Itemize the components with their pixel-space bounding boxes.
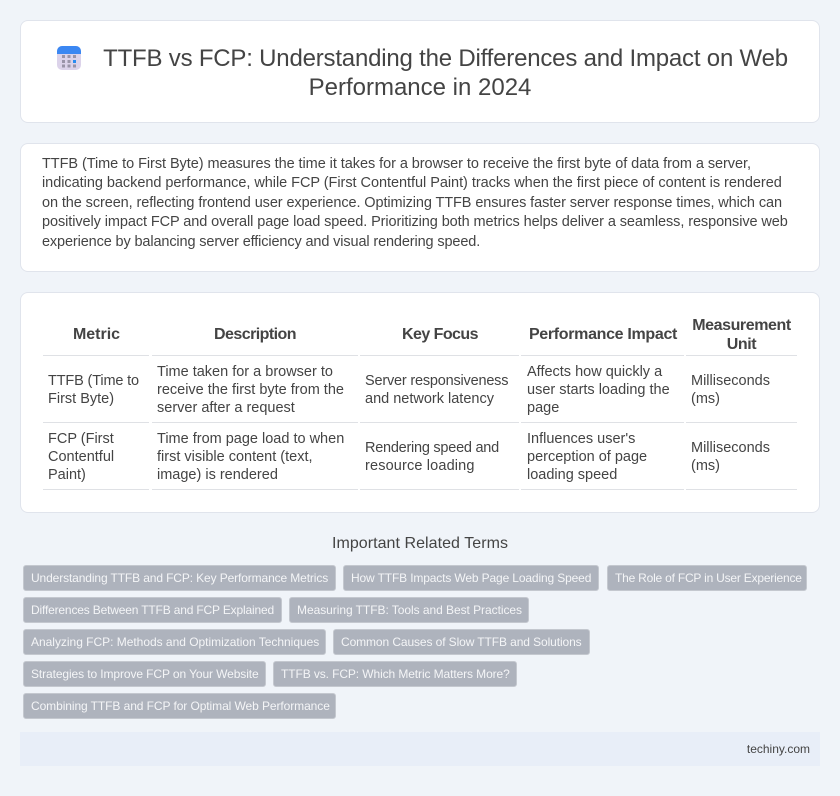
table headers: Unit <box>727 336 756 353</box>
row: TTFB: Milliseconds <box>691 373 770 389</box>
row: FCP: Influences user's <box>527 431 635 447</box>
chip: TTFB vs. FCP: Which Metric Matters More? <box>281 667 510 681</box>
row: FCP: first visible content (text, <box>157 449 313 465</box>
related terms heading: Important Related Terms <box>332 535 508 552</box>
row: TTFB <box>48 364 770 416</box>
row: TTFB: Server responsiveness <box>365 373 508 389</box>
row: FCP: perception of page <box>527 449 647 465</box>
chip <box>23 597 282 623</box>
chip: Analyzing FCP: Methods and Optimization Techniques <box>31 635 319 649</box>
chip <box>343 565 599 591</box>
row: FCP: Time from page load to when <box>157 431 344 447</box>
chip: How TTFB Impacts Web Page Loading Speed <box>351 571 591 585</box>
intro text: positively impact FCP and overall page load speed. Prioritizing both metrics helps deliver a seamless, responsive web <box>42 214 788 230</box>
row: FCP: resource loading <box>365 458 475 474</box>
row: FCP: Milliseconds <box>691 440 770 456</box>
table panel <box>20 292 820 513</box>
chip <box>273 661 517 687</box>
row: FCP: (ms) <box>691 458 720 474</box>
chip <box>289 597 529 623</box>
title: TTFB vs FCP: Understanding the Differences and Impact on Web <box>103 45 788 72</box>
comparison table <box>43 317 797 490</box>
chip: Common Causes of Slow TTFB and Solutions <box>341 635 582 649</box>
title: Performance in 2024 <box>309 74 531 101</box>
row: FCP: Paint) <box>48 467 86 483</box>
row: TTFB: TTFB (Time to <box>48 373 139 389</box>
chip <box>23 629 326 655</box>
row: FCP: loading speed <box>527 467 617 483</box>
icon: calendar <box>57 46 81 70</box>
chip: Measuring TTFB: Tools and Best Practices <box>297 603 522 617</box>
row: TTFB: and network latency <box>365 391 494 407</box>
intro text: indicating backend performance, while FCP (First Contentful Paint) tracks when the first piece of content is rendered <box>42 175 782 191</box>
table headers <box>73 317 791 353</box>
row: FCP: Contentful <box>48 449 114 465</box>
row: TTFB: Affects how quickly a <box>527 364 662 380</box>
chip <box>23 565 336 591</box>
row: TTFB: user starts loading the <box>527 382 670 398</box>
header panel <box>20 20 820 123</box>
footer brand: techiny.com <box>747 742 810 756</box>
title <box>103 45 788 101</box>
row: TTFB: receive the first byte from the <box>157 382 344 398</box>
table headers: Performance Impact <box>529 326 677 343</box>
chip <box>23 693 336 719</box>
intro text: TTFB (Time to First Byte) measures the time it takes for a browser to receive the first byte of data from a server, <box>42 156 751 172</box>
chip: Differences Between TTFB and FCP Explained <box>31 603 274 617</box>
table headers: Measurement <box>692 317 791 334</box>
chip: The Role of FCP in User Experience <box>615 571 802 585</box>
related terms chips <box>23 565 807 719</box>
row: FCP: FCP (First <box>48 431 114 447</box>
intro text: on the screen, reflecting frontend user experience. Optimizing TTFB ensures faster server response times, which can <box>42 194 782 210</box>
row: TTFB: First Byte) <box>48 391 114 407</box>
row: FCP <box>48 431 770 483</box>
chip <box>23 661 266 687</box>
table headers: Metric <box>73 326 120 343</box>
intro panel <box>20 143 820 272</box>
intro text <box>42 156 788 250</box>
row: TTFB: page <box>527 400 559 416</box>
table headers: Description <box>214 326 296 343</box>
chip: Understanding TTFB and FCP: Key Performance Metrics <box>31 571 328 585</box>
row: FCP: Rendering speed and <box>365 440 499 456</box>
row: TTFB: (ms) <box>691 391 720 407</box>
table headers: Key Focus <box>402 326 478 343</box>
chip: Combining TTFB and FCP for Optimal Web Performance <box>31 699 330 713</box>
row: TTFB: Time taken for a browser to <box>157 364 333 380</box>
row: FCP: image) is rendered <box>157 467 278 483</box>
footer bar <box>20 732 820 766</box>
intro text: experience by balancing server efficiency and visual rendering speed. <box>42 234 480 250</box>
chip <box>607 565 807 591</box>
chip <box>333 629 590 655</box>
chip: Strategies to Improve FCP on Your Website <box>31 667 259 681</box>
row: TTFB: server after a request <box>157 400 295 416</box>
